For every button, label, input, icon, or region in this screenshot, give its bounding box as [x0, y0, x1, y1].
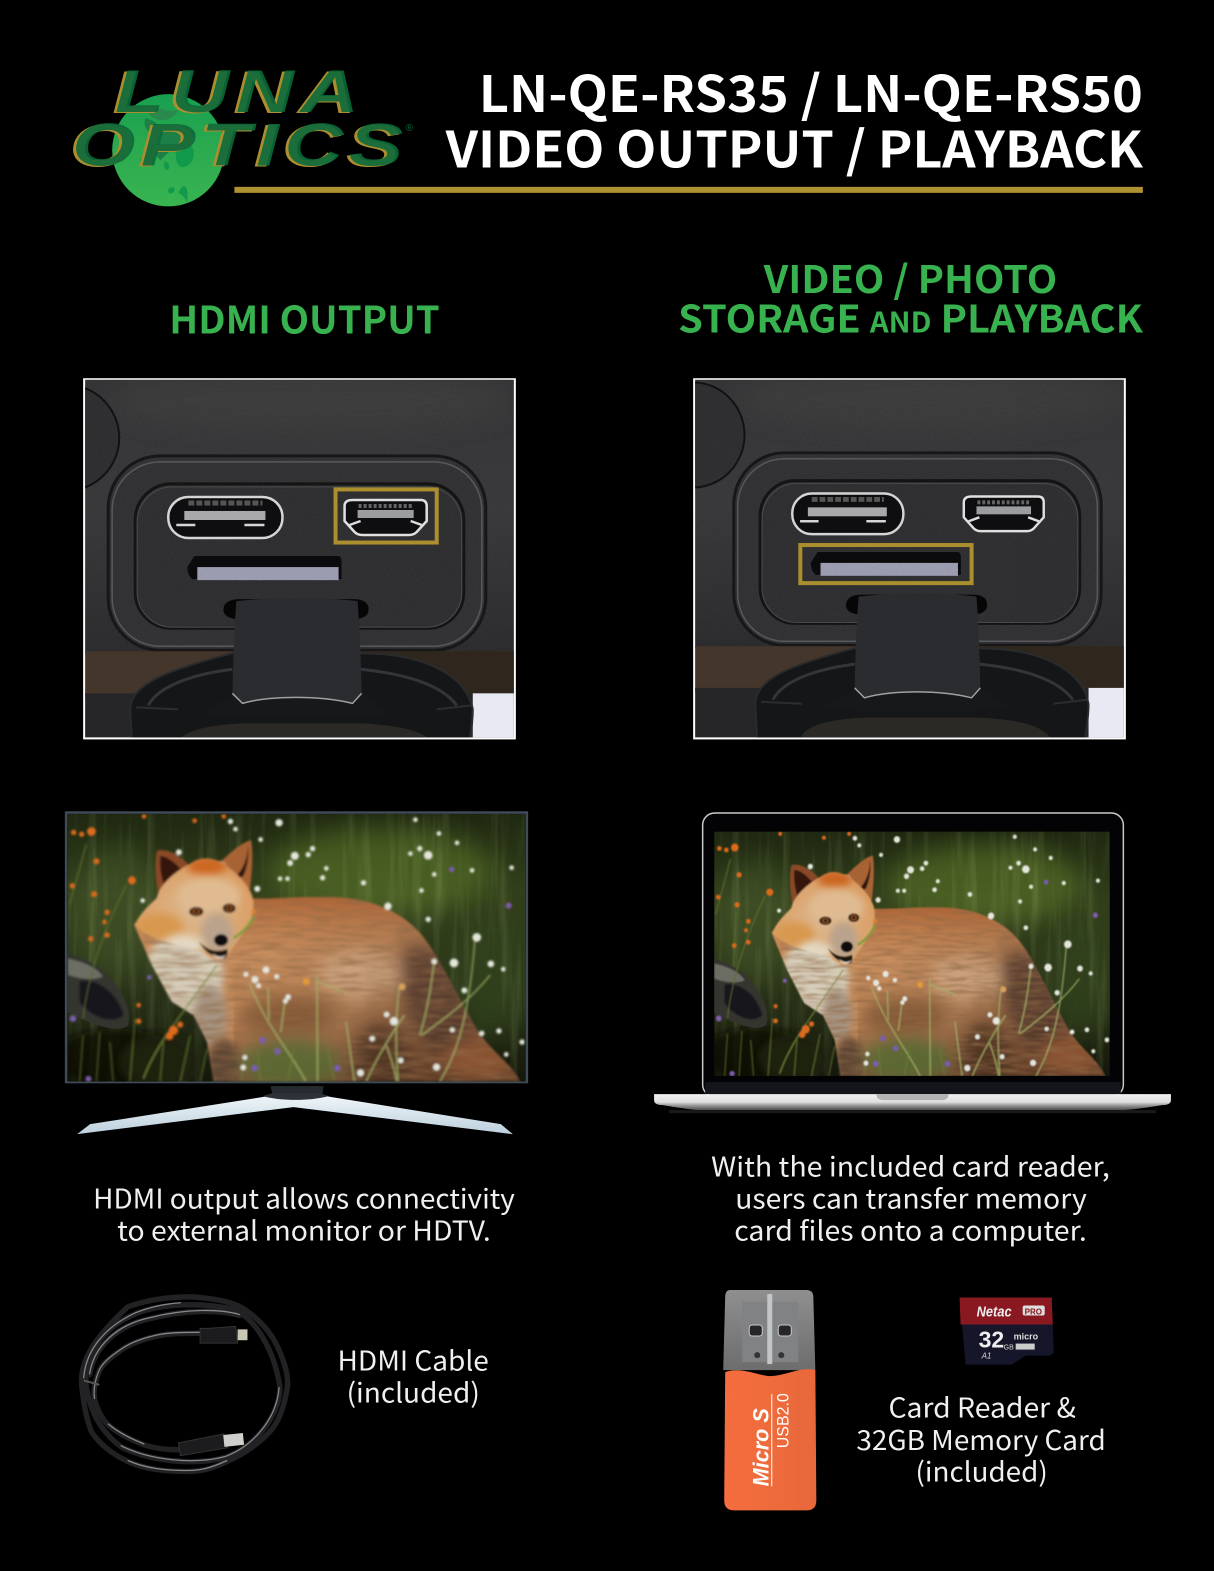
laptop with fox image — [654, 813, 1171, 1113]
wordmark: OPTICS: OPTICS — [69, 112, 406, 179]
text: card reader label: Card Reader & — [888, 1387, 1076, 1426]
heading: video photo storage and playback: VIDEO / PHOTO — [763, 249, 1057, 304]
title underline — [234, 187, 1143, 193]
text: card reader description: card files onto a computer. — [734, 1209, 1087, 1248]
TV stand — [77, 1086, 513, 1134]
text: HDMI description: to external monitor or HDTV. — [117, 1209, 491, 1248]
wordmark: OPTICS: OPTICS — [72, 111, 409, 178]
text: card reader description: With the included card reader, — [711, 1146, 1110, 1185]
panel: HDMI port photo — [83, 378, 516, 740]
icon: memory card — [960, 1297, 1054, 1365]
icon: memory card: micro — [1014, 1332, 1039, 1342]
heading: video photo storage and playback — [678, 249, 1144, 344]
title — [445, 55, 1144, 182]
heading: video photo storage and playback: STORAGE AND PLAYBACK — [678, 289, 1144, 344]
icon: globe — [112, 94, 224, 206]
title: LN-QE-RS35 / LN-QE-RS50 — [479, 55, 1143, 127]
icon: memory card: PRO — [1025, 1308, 1042, 1317]
panel: memory card slot photo — [693, 378, 1126, 740]
text: HDMI cable label: HDMI Cable — [338, 1340, 489, 1379]
text: HDMI description — [93, 1177, 515, 1248]
text: card reader description: users can transfer memory — [735, 1177, 1087, 1216]
text: card reader label: (included) — [916, 1450, 1048, 1489]
text: HDMI cable label: (included) — [347, 1372, 480, 1411]
text: HDMI description: HDMI output allows connectivity — [93, 1177, 515, 1216]
reader label — [748, 1393, 792, 1486]
wordmark: LUNA: LUNA — [112, 59, 363, 126]
reader label: USB2.0 — [773, 1393, 792, 1448]
logo: Luna Optics — [69, 58, 414, 206]
title: VIDEO OUTPUT / PLAYBACK — [445, 110, 1144, 182]
icon: memory card: Netac — [977, 1304, 1012, 1321]
text: card reader description — [711, 1146, 1110, 1248]
highlight: HDMI port — [336, 489, 437, 543]
icon: memory card: GB — [1004, 1345, 1014, 1352]
text: card reader label — [856, 1387, 1106, 1489]
icon: HDMI cable — [82, 1297, 288, 1471]
connectors — [200, 1326, 238, 1343]
icon: memory card: A1 — [981, 1352, 991, 1361]
reader label: Micro S — [748, 1408, 773, 1486]
highlight: card slot — [800, 545, 972, 583]
heading: HDMI output: HDMI OUTPUT — [169, 290, 440, 345]
text: card reader label: 32GB Memory Card — [856, 1419, 1106, 1458]
laptop base — [654, 1094, 1171, 1113]
TV with fox image — [53, 813, 529, 1134]
text: HDMI cable label — [338, 1340, 489, 1411]
icon: memory card: 32 — [979, 1327, 1004, 1353]
icon: USB card reader — [723, 1290, 816, 1510]
registered mark: ® — [406, 123, 414, 134]
wordmark: LUNA: LUNA — [115, 58, 366, 125]
